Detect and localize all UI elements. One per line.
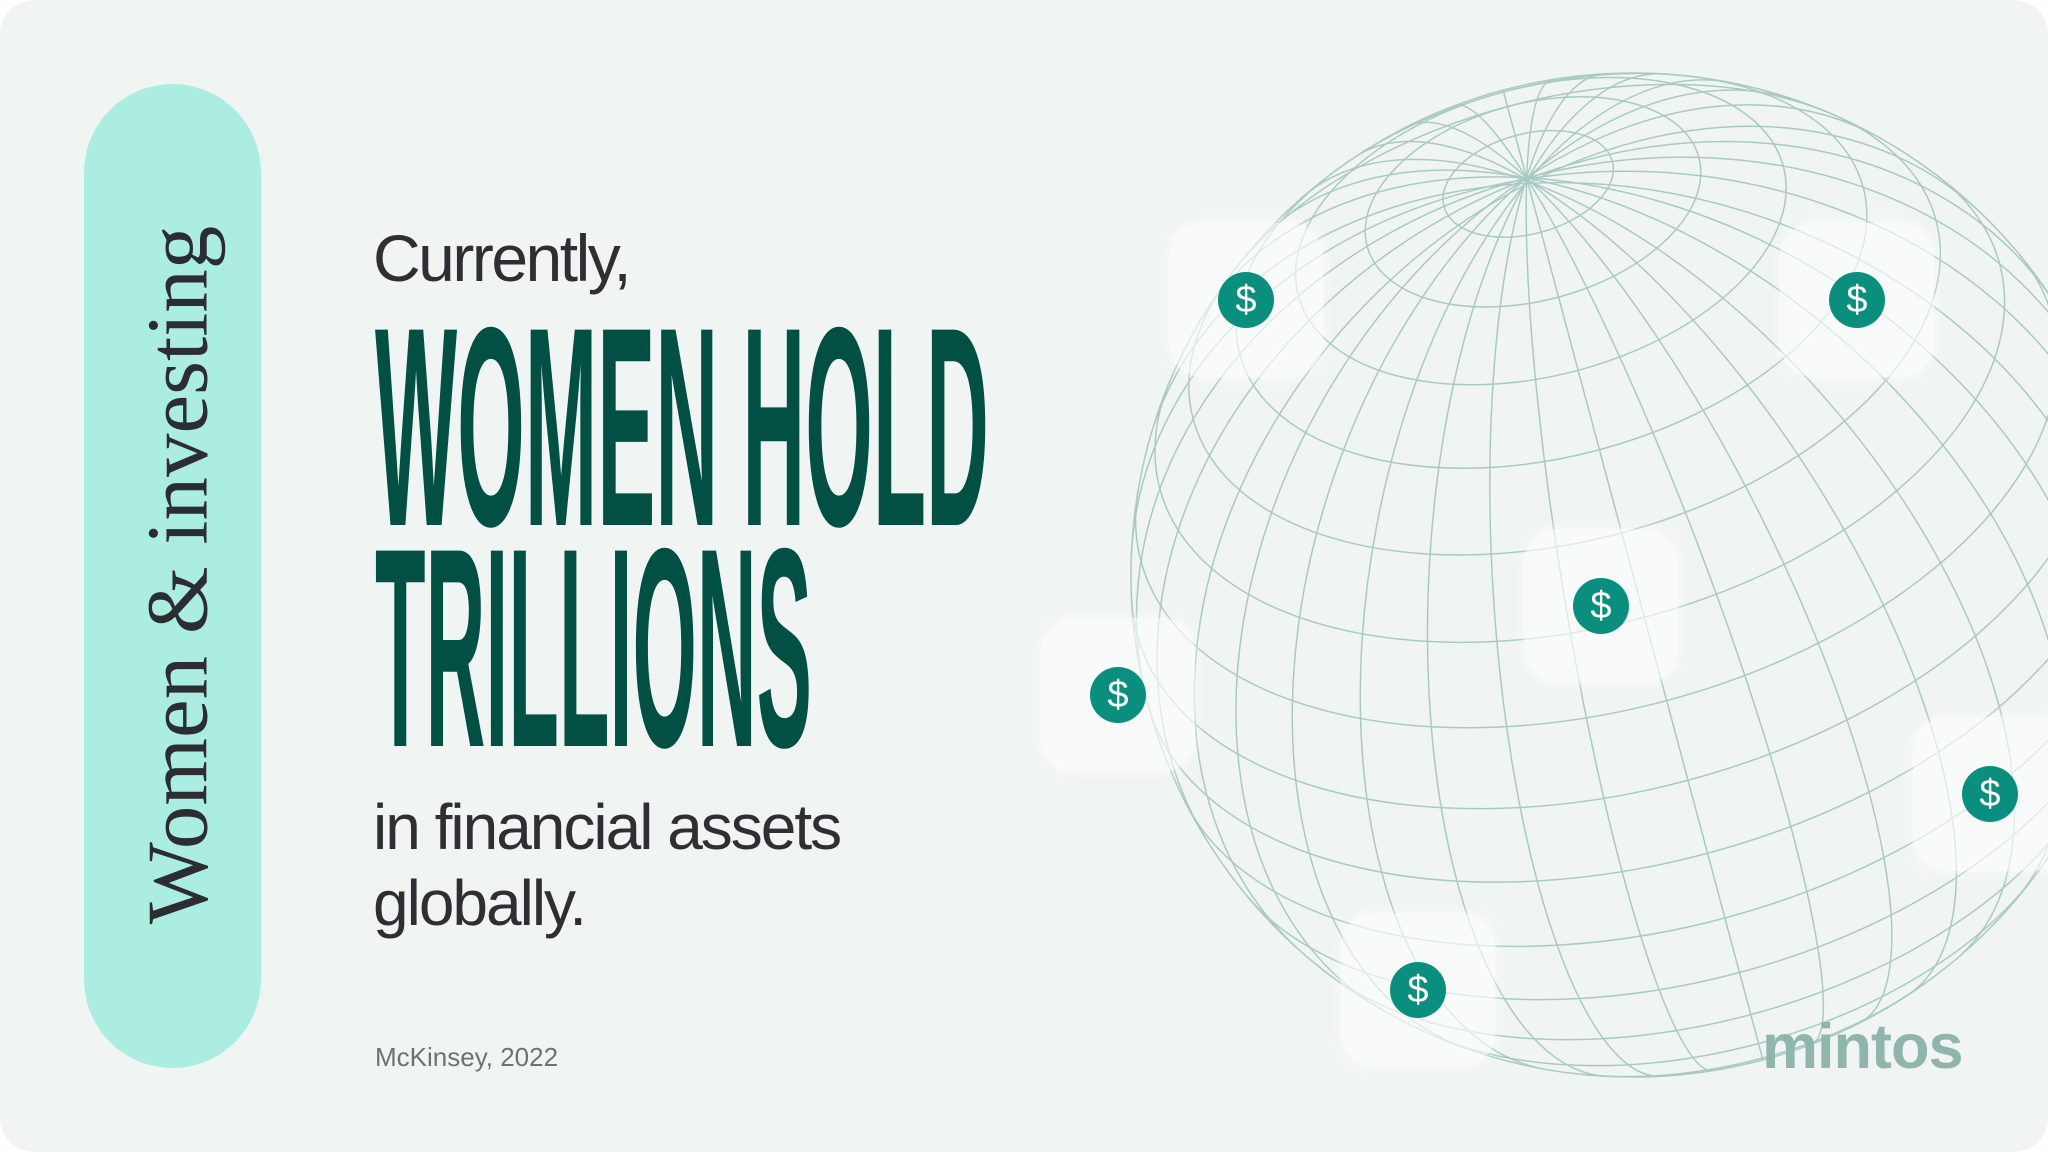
icon: dollar tile 2 — [1780, 223, 1934, 377]
icon: dollar tile 1: $ — [1235, 279, 1257, 321]
icon: dollar tile 4 — [1041, 618, 1195, 772]
icon: dollar tile 3 — [1524, 529, 1678, 683]
closing text — [373, 791, 840, 939]
closing text: in financial assets — [373, 791, 840, 863]
closing text: globally. — [373, 867, 585, 939]
icon: dollar tile 1 — [1169, 223, 1323, 377]
logo: mintos: mintos — [1762, 1012, 1963, 1082]
intro text: Currently, — [373, 221, 629, 295]
headline — [375, 269, 989, 807]
icon: dollar tile 5 — [1913, 717, 2048, 871]
headline: TRILLIONS — [375, 490, 812, 807]
icon: dollar tile 4: $ — [1107, 674, 1129, 716]
icon: dollar tile 6: $ — [1407, 969, 1429, 1011]
icon: dollar tile 2: $ — [1846, 279, 1868, 321]
vertical text: Women & investing: Women & investing — [128, 226, 226, 924]
icon: dollar tile 6 — [1341, 913, 1495, 1067]
source: McKinsey, 2022 — [375, 1042, 558, 1072]
side pill label — [84, 84, 261, 1068]
icon: dollar tile 5: $ — [1979, 773, 2001, 815]
headline: WOMEN HOLD — [375, 269, 989, 586]
icon: dollar tile 3: $ — [1590, 585, 1612, 627]
